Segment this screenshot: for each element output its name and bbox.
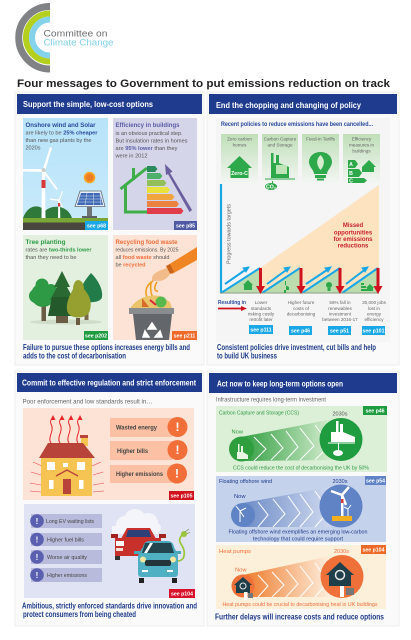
callout: higher bills: ! (176, 443, 180, 457)
logo: Committee on Climate Change (19, 6, 114, 69)
item: higher emissions (30, 568, 102, 582)
footer text: standards: Ambitious, strictly enforced standards drive innovation and (22, 602, 197, 610)
result: jobs lost: 30,000 jobs (362, 300, 387, 305)
resulting in: Resulting in (218, 300, 247, 306)
result: jobs lost (362, 300, 387, 335)
sub-panel: recycling food waste: reduces emissions. By 2025 (116, 248, 179, 254)
sub-panel: recycling food waste (113, 235, 197, 340)
callout: higher emissions (110, 464, 187, 484)
sub-panel: heat pumps: Heat pumps (219, 549, 251, 555)
sub-panel: floating offshore wind: Now (234, 494, 246, 500)
panel: act now (207, 371, 399, 626)
callout: higher bills: Higher bills (117, 448, 149, 455)
footer text: support: Failure to pursue these options increases energy bills and (23, 343, 190, 352)
sub-panel: onshore wind and solar: 2020s (26, 146, 41, 152)
heading: commit (17, 373, 202, 392)
icon: cloud (112, 509, 161, 534)
chart: energy rating bars (147, 166, 184, 214)
result: jobs lost: see p101 (363, 328, 385, 334)
sub-panel: floating offshore wind: Floating offshore wind (219, 479, 272, 485)
footer text: standards: protect consumers from being cheated (23, 610, 136, 619)
sub-panel: efficiency in buildings: But insulation rates in homes (116, 138, 188, 144)
footer text: policy (217, 343, 376, 360)
icon: house (39, 435, 95, 496)
sub-panel: efficiency in buildings: are 95% lower than they (116, 146, 178, 152)
icon: 2030s circle (320, 555, 364, 598)
heading: support (17, 94, 202, 114)
heading: end the chopping: End the chopping and changing of policy (216, 100, 361, 110)
card: zero carbon homes: homes (233, 142, 247, 148)
mini icons (243, 280, 374, 293)
item: higher emissions: Higher emissions (47, 573, 87, 579)
panel: end the chopping and changing of policy (207, 92, 399, 365)
intro text: infrastructure: Infrastructure requires long-term investment (216, 396, 326, 404)
see p202: see p202 (85, 334, 107, 340)
chart: growth wedge (243, 487, 330, 527)
sub-panel: efficiency in buildings: is an obvious practical step. (116, 131, 183, 137)
sub-panel: onshore wind and solar: than new gas plants by the (26, 138, 92, 144)
item: higher fuel bills (30, 533, 102, 546)
missed opportunities label (333, 223, 373, 250)
caption: Heat pumps could be crucial to decarbonising heat in UK buildings (222, 602, 378, 608)
callout: wasted energy: Wasted energy (116, 424, 158, 432)
result: fall in investment: see p51 (330, 328, 349, 334)
icon: side heat lines (30, 462, 104, 492)
green teeth (222, 268, 378, 293)
card: carbon capture and storage: Carbon Capture (264, 136, 297, 142)
missed opportunities area (260, 185, 379, 293)
sub-panel: floating offshore wind: 2030s (332, 479, 348, 485)
result: fall in investment: between 2016-17 (322, 317, 358, 322)
item: worse air quality (30, 550, 102, 564)
sub-panel: tree planting: rates are two-thirds lower (26, 248, 92, 254)
result: lower standards: standards (251, 306, 272, 311)
icon: heat arrows (50, 417, 80, 443)
sub-panel: onshore wind and solar: are likely to be 25% cheaper (26, 130, 98, 136)
sub-panel: house heat loss (23, 408, 194, 500)
callout: higher bills (110, 440, 188, 460)
icon: 2030s circle (320, 418, 362, 461)
icon: 2030s circle (320, 484, 362, 528)
result: lower standards: see p111 (250, 328, 272, 334)
subheading: cancelled: Recent policies to reduce emissions have been cancelled... (221, 122, 373, 128)
logo: Committee on Climate Change: Committee on (44, 28, 108, 38)
sub-panel: carbon capture and storage (216, 406, 387, 472)
card: carbon capture and storage (262, 134, 298, 190)
sub-panel: cars (24, 504, 195, 598)
callout: wasted energy (110, 417, 188, 437)
missed opportunities label: Missed (343, 223, 364, 229)
icon: orange peel (146, 281, 158, 300)
missed opportunities label: for emissions (333, 237, 373, 243)
caption: CCS could reduce the cost of decarbonising the UK by 50% (233, 466, 369, 472)
heading: commit: Commit to effective regulation and strict enforcement (22, 378, 196, 388)
footer text: support (23, 343, 190, 360)
item: higher emissions: ! (36, 571, 38, 580)
card: carbon capture and storage: CO₂ (266, 184, 277, 190)
caption: Floating offshore wind exemplifies an emerging low-carbon (228, 530, 368, 536)
result: lower standards: Lower (255, 300, 268, 305)
see p104 (361, 545, 386, 554)
see p54 (365, 476, 386, 485)
icon: recycling bin (129, 308, 174, 340)
item: long EV waiting lists (30, 514, 102, 528)
see p104 (169, 589, 195, 598)
see p54: see p54 (366, 478, 385, 484)
sub-panel: floating offshore wind (216, 476, 386, 542)
sub-panel: efficiency in buildings (113, 118, 197, 230)
heading: act now: Act now to keep long-term options open (217, 378, 343, 388)
card: efficiency measures: buildings (352, 148, 371, 154)
sub-panel: onshore wind and solar: Onshore wind and Solar (26, 122, 96, 129)
icon: food scraps (131, 295, 172, 308)
ground (23, 218, 108, 222)
result: jobs lost: energy (367, 312, 382, 316)
card: feed-in tariffs (302, 134, 339, 184)
card: efficiency measures: A (349, 162, 353, 168)
sub-panel: recycling food waste: Recycling food waste (116, 239, 178, 246)
result: higher future costs: see p46 (291, 328, 310, 334)
icon: teal car (134, 541, 181, 583)
result: lower standards: risking costly (248, 312, 275, 316)
icon: small wind turbine (50, 191, 63, 218)
heading: end the chopping (209, 94, 397, 114)
sawtooth lines (221, 268, 378, 293)
missed opportunities label: reductions (338, 244, 369, 250)
arrow: purple up (165, 164, 192, 212)
card: feed-in tariffs: Feed-in Tariffs (306, 136, 336, 142)
blue arrows (225, 268, 367, 284)
card: zero carbon homes (221, 134, 258, 184)
icon: plug cable (176, 534, 184, 561)
item: long EV waiting lists: Long EV waiting lists (46, 519, 94, 525)
see p104: see p104 (363, 548, 385, 554)
sub-panel: carbon capture and storage: Now (232, 430, 244, 436)
sub-panel: efficiency in buildings: were in 2012 (115, 154, 148, 160)
item: long EV waiting lists: ! (36, 517, 38, 526)
card: efficiency measures: Efficiency (352, 136, 372, 142)
axis label: Progress towards targets (226, 204, 232, 264)
logo: Committee on Climate Change: Climate Change (44, 38, 114, 48)
icon: sun (84, 172, 95, 183)
heading: act now (209, 373, 397, 393)
panel: support the simple, low-cost options (15, 92, 204, 365)
axis (220, 184, 222, 293)
card: carbon capture and storage: and Storage (267, 142, 293, 148)
sub-panel: tree planting (23, 235, 108, 340)
icon: hills (23, 206, 72, 218)
intro text: poor enforcement: Poor enforcement and low standards result in… (22, 398, 152, 406)
see p68: see p68 (87, 224, 106, 230)
item: worse air quality: Worse air quality (47, 555, 87, 561)
result: jobs lost: lost in (368, 306, 380, 311)
item: higher fuel bills: ! (36, 536, 38, 544)
missed opportunities label: opportunities (334, 230, 373, 236)
card: efficiency measures: C (349, 178, 353, 184)
footer text: support: adds to the cost of decarbonisation (23, 352, 126, 360)
footer text: policy: to build UK business (217, 352, 277, 360)
card: efficiency measures: B (349, 171, 353, 177)
panel: commit to effective regulation (15, 371, 204, 626)
caption: technology that could require support (253, 536, 343, 542)
chart: progress towards targets (220, 184, 382, 294)
result: fall in investment: investment (329, 312, 352, 316)
resulting in (218, 300, 247, 311)
icon: green house outline (120, 168, 147, 212)
result: jobs lost: efficiency (364, 317, 384, 322)
sub-panel: heat pumps: Now (235, 568, 247, 574)
callout: wasted energy: ! (176, 420, 180, 434)
result: higher future costs: Higher future (288, 300, 315, 305)
sub-panel: recycling food waste: all food waste should (116, 255, 170, 261)
callout: higher emissions: Higher emissions (116, 471, 163, 478)
sub-panel: carbon capture and storage: Carbon Capture and Storage (CCS) (219, 410, 299, 416)
icon: now circle (231, 503, 255, 527)
item: worse air quality: ! (36, 553, 38, 562)
result: higher future costs: costs of (293, 306, 310, 311)
card: efficiency measures: measures in (349, 142, 374, 148)
card: efficiency measures (343, 134, 380, 184)
sub-panel: tree planting: Tree planting (26, 239, 66, 246)
sub-panel: onshore wind and solar (23, 118, 108, 230)
see p211: see p211 (174, 334, 195, 340)
card: zero carbon homes: Zero carbon (227, 136, 252, 142)
result: fall in investment: 56% fall in (329, 300, 351, 305)
see p105 (169, 491, 194, 500)
chart: growth wedge (241, 419, 333, 461)
heading: support: Support the simple, low-cost options (23, 99, 153, 109)
icon: now circle (232, 574, 254, 600)
icon: now circle (229, 436, 254, 462)
chart: growth wedge (243, 556, 330, 597)
result: lower standards: retrofit later (249, 317, 273, 322)
result: fall in investment (322, 300, 358, 335)
item: higher fuel bills: Higher fuel bills (47, 538, 84, 544)
card: zero carbon homes: Zero-C (231, 171, 248, 177)
see p104: see p104 (171, 592, 193, 598)
icon: big wind turbine (23, 147, 58, 218)
sub-panel: heat pumps: 2030s (334, 549, 349, 555)
icon: solar panel (75, 191, 105, 218)
result: higher future costs (287, 300, 316, 335)
see p85: see p85 (176, 224, 195, 230)
see p46: see p46 (365, 408, 385, 414)
icon: red car (111, 528, 166, 560)
footer text: standards (22, 602, 197, 619)
icon: trees (29, 271, 102, 325)
result: lower standards (248, 300, 275, 334)
sub-panel: efficiency in buildings: Efficiency in buildings (116, 122, 180, 129)
red arrows (256, 268, 382, 294)
caption (228, 530, 368, 542)
callout: higher emissions: ! (175, 466, 179, 480)
see p105: see p105 (171, 494, 193, 500)
sub-panel: tree planting: than they need to be (26, 255, 77, 261)
sub-panel: heat pumps (216, 545, 386, 609)
title: Four messages to Government to put emissions reduction on track (17, 78, 390, 90)
result: fall in investment: renewables (328, 306, 352, 311)
result: higher future costs: decarbonising (287, 312, 316, 316)
see p46 (363, 406, 387, 415)
sub-panel: recycling food waste: be recycled (116, 262, 146, 268)
sub-panel: carbon capture and storage: 2030s (332, 412, 348, 418)
icon: arm and hand (152, 247, 197, 281)
